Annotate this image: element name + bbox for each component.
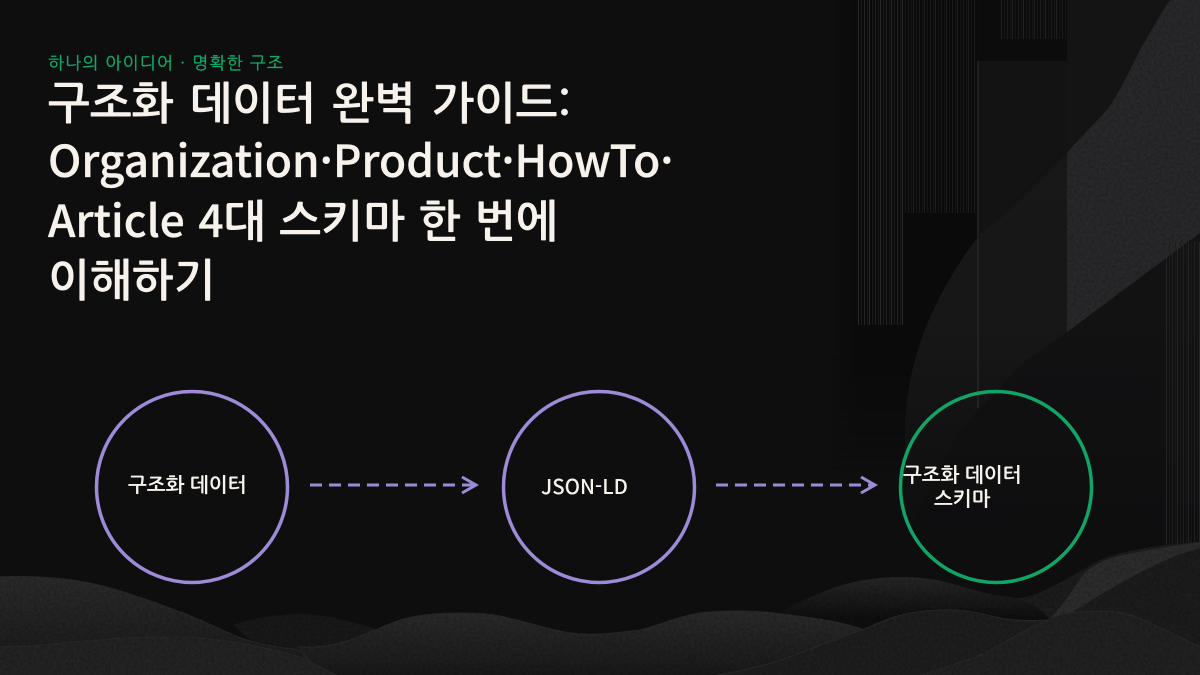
- title: Article 4대 스키마 한 번에: [48, 186, 558, 250]
- title: Organization·Product·HowTo·: [48, 126, 674, 190]
- circle: 구조화 데이터: [96, 392, 288, 582]
- label: JSON-LD: JSON-LD: [541, 470, 628, 500]
- label: 구조화 데이터: 구조화 데이터: [128, 475, 246, 495]
- circle: JSON-LD: [504, 392, 694, 582]
- label: 구조화 데이터 스키마: 스키마: [934, 489, 990, 509]
- top right architecture: [858, 0, 1200, 545]
- title: 이해하기: [48, 259, 215, 303]
- label: 구조화 데이터 스키마: 구조화 데이터: [903, 465, 1021, 485]
- arrow: 구조화 데이터 to JSON-LD: [310, 477, 476, 493]
- title: 구조화 데이터 완벽 가이드:: [48, 82, 571, 126]
- title: [48, 82, 674, 303]
- arrow: JSON-LD to 스키마: [716, 477, 875, 493]
- circle: 구조화 데이터 스키마: [900, 392, 1092, 582]
- bottom wave landscape: [0, 542, 1200, 675]
- eyebrow heading: 하나의 아이디어 · 명확한 구조: [48, 55, 284, 72]
- label: 구조화 데이터 스키마: [903, 465, 1021, 509]
